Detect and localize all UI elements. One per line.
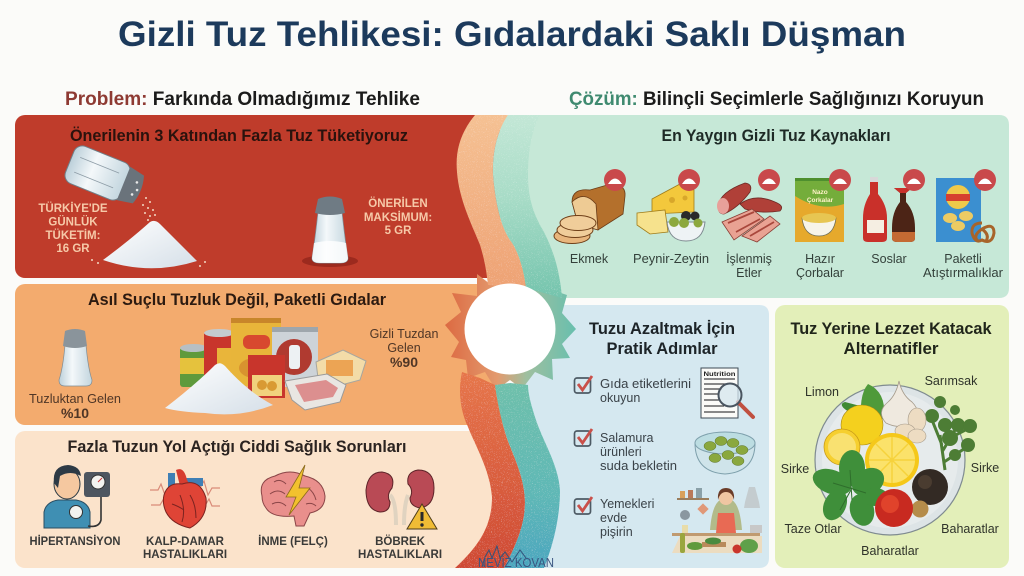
panel: salt consumption bbox=[15, 115, 505, 278]
labels: health conditions: HASTALIKLARI bbox=[358, 549, 442, 561]
icon: packaged foods group bbox=[180, 318, 366, 410]
labels: health conditions bbox=[30, 535, 442, 561]
icon: bread bbox=[554, 183, 625, 244]
icon: nutrition label and magnifier: Nutrition bbox=[704, 371, 736, 378]
panel: flavor alternatives bbox=[775, 305, 1009, 568]
heading: problem: Problem: Farkında Olmadığımız Tehlike bbox=[65, 89, 420, 110]
label: 5 gr: MAKSİMUM: bbox=[364, 211, 432, 224]
panel title: Pratik Adımlar bbox=[606, 340, 718, 358]
step texts: Gıda etiketlerini bbox=[600, 377, 691, 391]
panel: health problems bbox=[15, 431, 505, 568]
centre ribbon: upper orange band bbox=[457, 115, 526, 288]
panel title: Asıl Suçlu Tuzluk Değil, Paketli Gıdalar bbox=[88, 291, 387, 309]
icon: tilted salt shaker bbox=[62, 143, 148, 209]
panel title: Önerilenin 3 Katından Fazla Tuz Tüketiyoruz bbox=[70, 126, 408, 145]
labels: alternatives: Taze Otlar bbox=[785, 522, 841, 536]
labels: salt sources: Çorbalar bbox=[796, 266, 844, 280]
labels: alternatives: Baharatlar bbox=[941, 522, 999, 536]
sun burst around circle bbox=[445, 274, 576, 390]
icon: chips and pretzel bbox=[936, 178, 994, 242]
step texts bbox=[600, 377, 691, 539]
labels: alternatives: Sirke bbox=[971, 461, 999, 475]
icon: processed meats bbox=[717, 183, 782, 242]
icon: upright salt shaker bbox=[302, 196, 358, 267]
labels: health conditions: HİPERTANSİYON bbox=[30, 535, 120, 548]
labels: salt sources: Ekmek bbox=[570, 252, 609, 266]
label: 16 gr: GÜNLÜK bbox=[48, 216, 98, 228]
step texts: pişirin bbox=[600, 525, 633, 539]
icon: plate with herbs and spices bbox=[809, 381, 977, 535]
labels: salt sources: Etler bbox=[736, 266, 762, 280]
icon: cheese and olives bbox=[637, 184, 705, 241]
title: Gizli Tuz Tehlikesi: Gıdalardaki Saklı Düşman bbox=[118, 15, 906, 54]
step texts: Yemekleri bbox=[600, 497, 654, 511]
labels: salt sources bbox=[570, 252, 1003, 280]
icon: hypertension bbox=[44, 465, 110, 528]
label: 10 percent: Tuzluktan Gelen bbox=[29, 392, 121, 406]
labels: alternatives: Baharatlar bbox=[861, 544, 919, 558]
icon: soup packet bbox=[795, 178, 844, 242]
white centre circle bbox=[464, 284, 556, 374]
labels: salt sources: Hazır bbox=[805, 252, 835, 266]
watermark: NEVİZ KOVAN bbox=[478, 555, 554, 570]
label: 16 gr: 16 GR bbox=[56, 243, 90, 255]
icon: salt pile large bbox=[103, 221, 197, 268]
labels: health conditions: BÖBREK bbox=[375, 535, 426, 548]
labels: alternatives: Limon bbox=[805, 385, 839, 399]
label: 5 gr: ÖNERİLEN bbox=[368, 197, 428, 210]
step texts: suda bekletin bbox=[600, 459, 677, 473]
icon: falling salt grains bbox=[91, 197, 206, 267]
panel title: En Yaygın Gizli Tuz Kaynakları bbox=[662, 127, 890, 145]
step texts: okuyun bbox=[600, 391, 640, 405]
label: 5 gr: 5 GR bbox=[385, 225, 412, 237]
icon: heart bbox=[150, 469, 220, 528]
icons: checkboxes bbox=[574, 376, 592, 514]
step texts: Salamura bbox=[600, 431, 654, 445]
labels: health conditions: İNME (FELÇ) bbox=[258, 535, 328, 548]
icon: nutrition label and magnifier bbox=[701, 368, 753, 418]
centre ribbon: upper green band bbox=[493, 115, 562, 298]
icon: soup packet: Nazo bbox=[812, 189, 828, 196]
panel: packaged foods bbox=[15, 284, 505, 425]
panel title: Tuzu Azaltmak İçin bbox=[589, 320, 735, 338]
label: 16 gr bbox=[38, 202, 108, 255]
labels: alternatives: Sarımsak bbox=[925, 374, 978, 388]
label: 90 percent bbox=[370, 327, 438, 370]
step texts: ürünleri bbox=[600, 445, 642, 459]
centre ribbon: lower teal band bbox=[495, 383, 560, 568]
labels: salt sources: Paketli bbox=[944, 252, 982, 266]
icon: brain with lightning bbox=[261, 465, 325, 526]
icon: bowl with olives bbox=[695, 432, 755, 474]
panel title: Alternatifler bbox=[844, 340, 939, 358]
panel title: Fazla Tuzun Yol Açtığı Ciddi Sağlık Sorunları bbox=[68, 438, 406, 456]
icons: salt warning badges bbox=[604, 169, 996, 191]
labels: salt sources: Soslar bbox=[871, 252, 907, 266]
panel title bbox=[589, 320, 735, 358]
labels: alternatives: Sirke bbox=[781, 462, 809, 476]
icon: kidneys and warning bbox=[366, 470, 437, 529]
labels: salt sources: İşlenmiş bbox=[726, 252, 772, 266]
label: 90 percent: Gelen bbox=[387, 341, 421, 355]
icon: sauces bbox=[863, 177, 915, 242]
label: 16 gr: TÜRKİYE'DE bbox=[38, 202, 108, 215]
icon: salt shaker bbox=[59, 329, 92, 386]
label: 16 gr: TÜKETİM: bbox=[46, 229, 100, 242]
icon: soup packet: Çorkalar bbox=[807, 197, 834, 204]
panel title: Tuz Yerine Lezzet Katacak bbox=[790, 320, 992, 338]
panel title bbox=[790, 320, 992, 358]
heading: solution: Çözüm: Bilinçli Seçimlerle Sağlığınızı Koruyun bbox=[569, 89, 984, 110]
label: 90 percent: Gizli Tuzdan bbox=[370, 327, 438, 341]
labels: health conditions: KALP-DAMAR bbox=[146, 536, 225, 548]
labels: health conditions: HASTALIKLARI bbox=[143, 549, 227, 561]
panel: hidden salt sources bbox=[500, 115, 1009, 298]
watermark bbox=[478, 546, 554, 570]
label: 90 percent: %90 bbox=[390, 354, 418, 370]
step texts: evde bbox=[600, 511, 627, 525]
labels: alternatives bbox=[781, 374, 999, 558]
labels: salt sources: Atıştırmalıklar bbox=[923, 266, 1003, 280]
labels: salt sources: Peynir-Zeytin bbox=[633, 252, 709, 266]
icon: person cooking in kitchen bbox=[672, 487, 762, 554]
label: 10 percent bbox=[29, 392, 121, 421]
label: 5 gr bbox=[364, 197, 432, 237]
icon: salt pile bbox=[165, 363, 273, 414]
centre ribbon: lower red band bbox=[455, 372, 525, 568]
panel: practical steps bbox=[520, 305, 769, 568]
label: 10 percent: %10 bbox=[61, 405, 89, 421]
